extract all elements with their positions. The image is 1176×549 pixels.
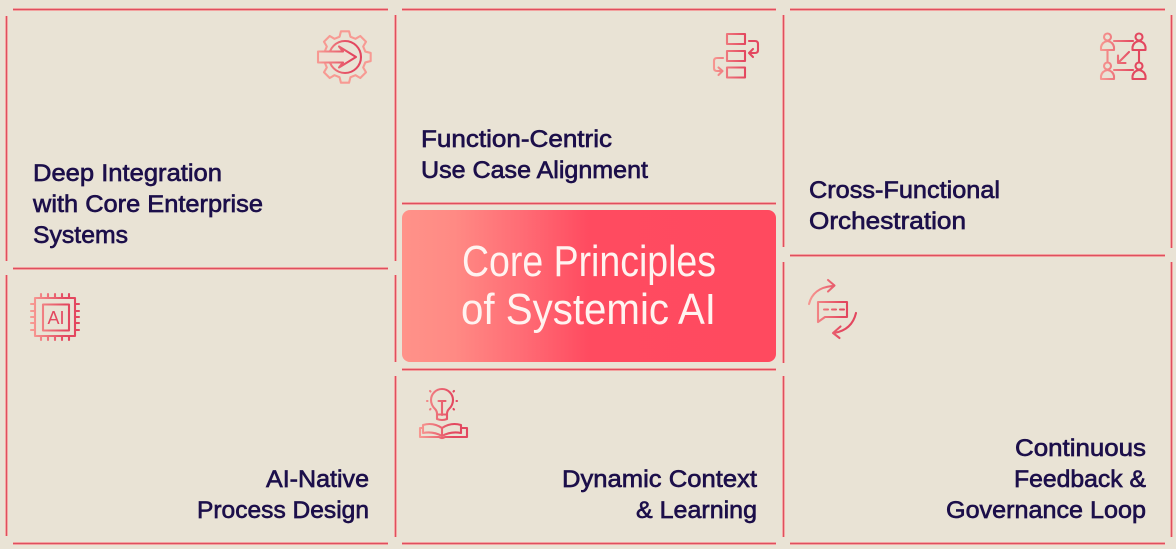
- icon: connected people: [1101, 34, 1146, 79]
- heading: ai-native: Process Design: [197, 497, 369, 524]
- icon label: AI: [47, 308, 65, 328]
- heading: dynamic context: & Learning: [636, 497, 757, 524]
- heading: dynamic context: [562, 466, 757, 524]
- heading: function-centric: Use Case Alignment: [421, 157, 648, 184]
- heading: cross-functional: Orchestration: [809, 208, 966, 235]
- icon: gear with arrow: [318, 31, 371, 83]
- heading: deep integration: [32, 160, 263, 249]
- heading: deep integration: Deep Integration: [33, 160, 222, 187]
- title: of Systemic AI: [461, 285, 716, 334]
- heading: continuous feedback: Feedback &: [1014, 466, 1146, 493]
- heading: deep integration: with Core Enterprise: [32, 191, 263, 218]
- icon: feedback loop chat: [809, 280, 856, 338]
- title: Core Principles: [462, 237, 716, 286]
- heading: dynamic context: Dynamic Context: [562, 466, 757, 493]
- heading: continuous feedback: [946, 435, 1146, 524]
- heading: deep integration: Systems: [33, 222, 128, 249]
- heading: cross-functional: [809, 177, 1000, 235]
- panel: continuous feedback: [784, 262, 1172, 544]
- heading: ai-native: [197, 466, 369, 524]
- heading: function-centric: [421, 126, 648, 184]
- icon: ai chip: [31, 294, 79, 340]
- title: [461, 237, 716, 334]
- panel: dynamic context: [402, 370, 784, 544]
- panel: function-centric: [402, 10, 784, 247]
- icon: process flow: [714, 34, 758, 78]
- heading: ai-native: AI-Native: [266, 466, 369, 493]
- heading: continuous feedback: Governance Loop: [946, 497, 1146, 524]
- panel: deep integration: [6, 10, 396, 268]
- panel: cross-functional: [790, 10, 1172, 256]
- panel: ai-native: [6, 275, 396, 544]
- icon: lightbulb and book: [420, 389, 467, 438]
- heading: continuous feedback: Continuous: [1015, 435, 1146, 462]
- heading: cross-functional: Cross-Functional: [809, 177, 1000, 204]
- heading: function-centric: Function-Centric: [421, 126, 612, 153]
- panel: core principles title: [402, 210, 776, 362]
